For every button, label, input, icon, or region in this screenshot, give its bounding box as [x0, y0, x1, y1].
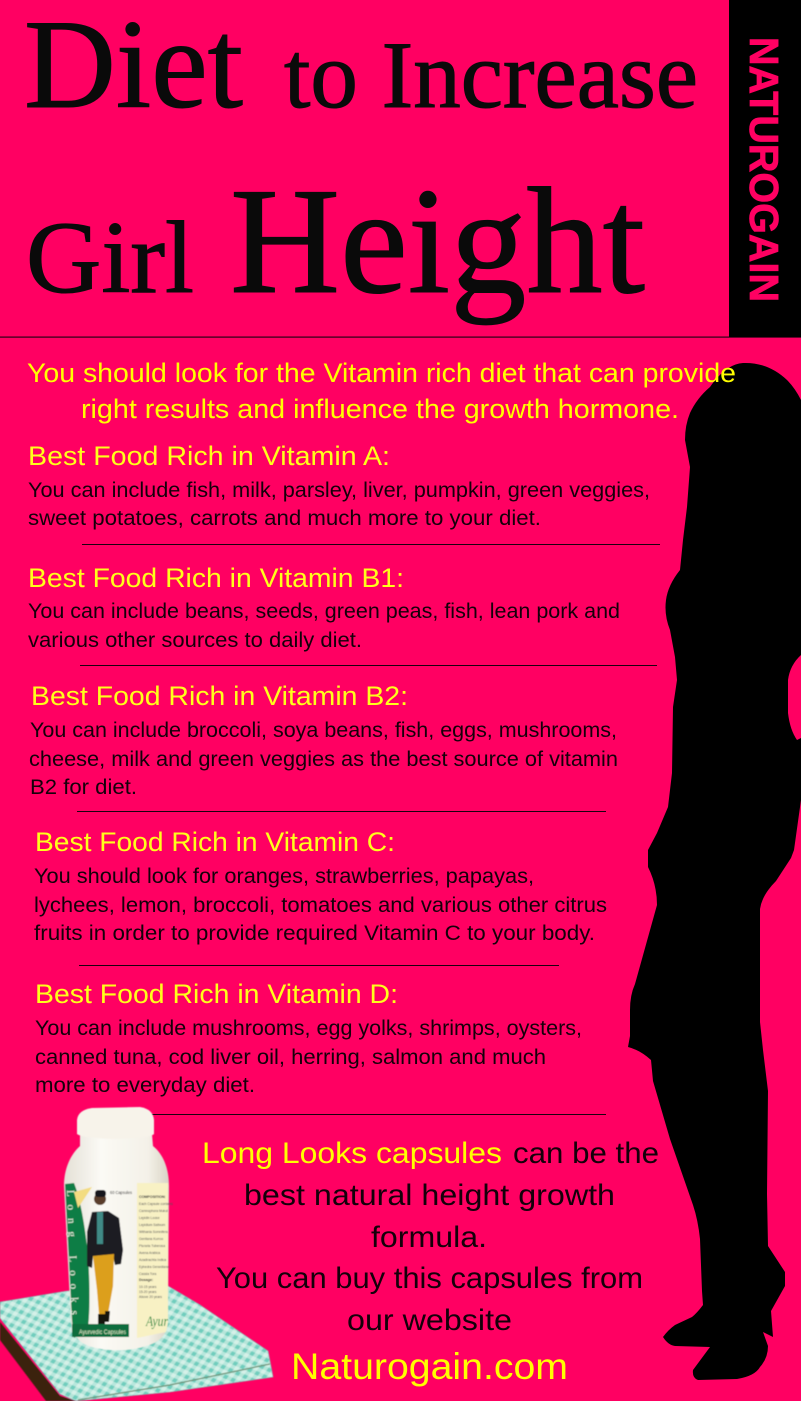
- bottle label text: Ayurvedic Capsules: [79, 1330, 126, 1336]
- title: Height: [230, 157, 645, 325]
- bottle label text: Pluraria Tuberosa: [139, 1244, 165, 1248]
- bottle label text: Above 20 years: [139, 1295, 162, 1299]
- green label strip: [65, 1183, 90, 1338]
- section: vitamin A: [28, 441, 650, 530]
- product callout: can be the: [513, 1137, 659, 1170]
- bottle label text: Avena Arabica: [139, 1251, 160, 1255]
- bottle label text: Each Capsule contains: [139, 1202, 173, 1206]
- section: vitamin B2: cheese, milk and green veggies as the best source of vitamin: [29, 747, 618, 771]
- section: vitamin B1: You can include beans, seeds, green peas, fish, lean pork and: [28, 599, 620, 623]
- bottle label text: Lepidin Loose: [139, 1216, 160, 1220]
- section: vitamin A: Best Food Rich in Vitamin A:: [28, 441, 390, 471]
- bottle label text: 60 Capsules: [110, 1190, 133, 1195]
- bottle cap: [77, 1107, 154, 1139]
- title: to Increase: [284, 22, 698, 128]
- bottle label text: Azadirachta Indica: [139, 1258, 166, 1262]
- section: vitamin B1: Best Food Rich in Vitamin B1:: [28, 563, 404, 593]
- product callout: our website: [347, 1304, 512, 1337]
- section: vitamin A: sweet potatoes, carrots and much more to your diet.: [28, 506, 541, 530]
- section: vitamin B2: You can include broccoli, soya beans, fish, eggs, mushrooms,: [30, 718, 617, 742]
- section: vitamin D: Best Food Rich in Vitamin D:: [35, 979, 398, 1009]
- towel fold: [78, 1364, 270, 1400]
- bottle label text: Ayur: [145, 1314, 168, 1330]
- table edge: [0, 1322, 76, 1401]
- section: vitamin C: You should look for oranges, strawberries, papayas,: [34, 864, 534, 888]
- folded towel: [0, 1286, 273, 1401]
- intro text: right results and influence the growth hormone.: [81, 394, 679, 424]
- bottle label text: Long Looks: [64, 1190, 80, 1315]
- supplement bottle: [64, 1107, 173, 1350]
- section: vitamin C: lychees, lemon, broccoli, tomatoes and various other citrus: [34, 893, 607, 917]
- section: vitamin B2: [29, 681, 618, 799]
- product photo: towel and bottle: [0, 1107, 273, 1401]
- man on the label: [87, 1190, 123, 1330]
- title: Girl: [26, 201, 194, 315]
- intro text: You should look for the Vitamin rich diet that can provide: [27, 358, 736, 388]
- bottle label text: COMPOSITION:: [139, 1195, 166, 1199]
- brand panel: [729, 0, 801, 337]
- product callout: [202, 1137, 659, 1337]
- bottle label text: Ephedra Gerardiana: [139, 1265, 169, 1269]
- product callout: Long Looks capsules: [202, 1137, 502, 1170]
- bottle label text: Gentiana Kurroo: [139, 1237, 163, 1241]
- section: vitamin C: Best Food Rich in Vitamin C:: [35, 827, 395, 857]
- product callout: formula.: [371, 1221, 487, 1254]
- section: vitamin D: more to everyday diet.: [35, 1073, 255, 1097]
- section: vitamin A: You can include fish, milk, parsley, liver, pumpkin, green veggies,: [28, 478, 650, 502]
- bottle label text: [64, 1190, 173, 1337]
- section: vitamin B2: Best Food Rich in Vitamin B2:: [31, 681, 408, 711]
- bottle label text: Withania Somnifera: [139, 1230, 168, 1234]
- bottle label text: Camnophora Mukul: [139, 1209, 168, 1213]
- brand panel: NATUROGAIN: [741, 37, 787, 302]
- bottle label text: Cassia Tora: [139, 1272, 157, 1276]
- section: vitamin B2: B2 for diet.: [30, 775, 137, 799]
- section: vitamin D: [35, 979, 582, 1097]
- cream composition panel: [137, 1183, 168, 1338]
- bottle label text: 15-20 years: [139, 1290, 157, 1294]
- section: vitamin D: canned tuna, cod liver oil, herring, salmon and much: [35, 1045, 546, 1069]
- silhouette of a woman: [628, 363, 801, 1380]
- bottle label text: 10-15 years: [139, 1285, 157, 1289]
- title: [24, 0, 698, 325]
- section: vitamin C: fruits in order to provide required Vitamin C to your body.: [34, 921, 595, 945]
- yellow burst: [74, 1187, 92, 1208]
- bottle label text: Lepidium Sativum: [139, 1223, 165, 1227]
- section: vitamin D: You can include mushrooms, egg yolks, shrimps, oysters,: [35, 1016, 582, 1040]
- section: vitamin B1: [28, 563, 620, 652]
- product callout: best natural height growth: [244, 1179, 615, 1212]
- section: vitamin B1: various other sources to daily diet.: [28, 628, 362, 652]
- section: vitamin C: [34, 827, 607, 945]
- header rule: [0, 336, 801, 338]
- website link text: Naturogain.com: [291, 1346, 568, 1387]
- product callout: You can buy this capsules from: [216, 1262, 643, 1295]
- intro text: [27, 358, 736, 424]
- bottle label text: Dosage:: [139, 1278, 153, 1282]
